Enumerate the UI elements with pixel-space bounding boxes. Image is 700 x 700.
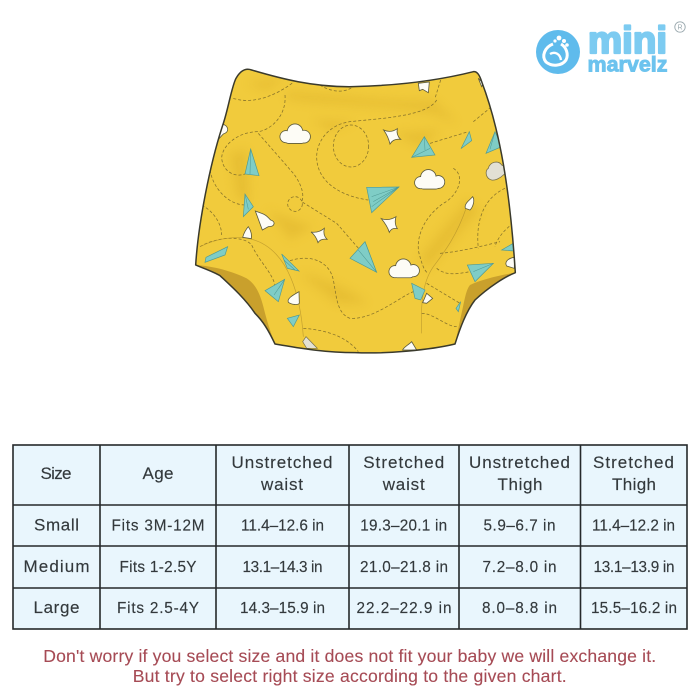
row: medium: 7.2–8.0 in: [482, 559, 556, 576]
header row: Stretched: [593, 453, 674, 472]
row: medium: Medium: [24, 557, 90, 576]
row: medium: Fits 1-2.5Y: [120, 559, 196, 576]
logo: mini marvelz: [536, 20, 685, 76]
row: small: 11.4–12.6 in: [241, 518, 324, 534]
exchange note: But try to select right size according to the given chart.: [133, 666, 567, 686]
cloud outlines: [280, 124, 444, 277]
row: medium: 21.0–21.8 in: [360, 559, 448, 576]
table grid: [13, 445, 687, 629]
row: medium: [24, 557, 674, 576]
stars: [311, 129, 401, 243]
exchange note: [43, 646, 656, 686]
cloud fills: [280, 124, 444, 277]
registered mark: R: [677, 24, 683, 32]
row: large: Fits 2.5-4Y: [117, 600, 199, 617]
fabric shading: [233, 96, 474, 301]
header row: Unstretched: [232, 453, 332, 472]
exchange note: Don't worry if you select size and it does not fit your baby we will exchange it.: [43, 646, 656, 666]
size chart table: [13, 445, 687, 629]
row: large: 14.3–15.9 in: [240, 600, 325, 617]
header row: Age: [142, 464, 174, 483]
fabric seams: [200, 207, 467, 337]
row: large: 8.0–8.8 in: [482, 600, 557, 617]
row: small: 11.4–12.2 in: [592, 518, 675, 534]
row: small: 5.9–6.7 in: [484, 518, 556, 534]
row: small: Small: [34, 516, 79, 534]
header row: [40, 453, 674, 494]
row: large: [34, 598, 677, 617]
row: small: Fits 3M-12M: [112, 518, 204, 534]
row: small: 19.3–20.1 in: [360, 518, 447, 534]
clouds: [215, 78, 514, 350]
registered mark: [675, 22, 685, 32]
row: large: 22.2–22.9 in: [356, 600, 452, 617]
row: medium: 13.1–13.9 in: [594, 559, 674, 576]
dashed flight paths: [200, 80, 513, 352]
header row: waist: [382, 475, 425, 494]
inner leg opening left: [196, 265, 275, 343]
header row: waist: [260, 475, 303, 494]
header row: Thigh: [612, 475, 656, 494]
logo wordmark mini: mini: [588, 20, 667, 62]
paper planes: [205, 132, 514, 327]
shorts outline: [196, 69, 515, 353]
header row: Unstretched: [469, 453, 570, 472]
row: large: 15.5–16.2 in: [591, 600, 677, 617]
header row: Thigh: [498, 475, 542, 494]
product illustration: yellow shorts: [196, 69, 515, 353]
shorts body: [196, 69, 515, 353]
row: small: [34, 516, 675, 534]
logo wordmark marvelz: marvelz: [588, 54, 668, 76]
row: medium: 13.1–14.3 in: [242, 559, 322, 576]
header row: Stretched: [363, 453, 444, 472]
row: large: Large: [34, 598, 80, 617]
inner leg opening right: [455, 273, 515, 344]
logo badge with footprint: [536, 30, 580, 74]
table background: [13, 445, 687, 629]
header row: Size: [40, 464, 72, 483]
